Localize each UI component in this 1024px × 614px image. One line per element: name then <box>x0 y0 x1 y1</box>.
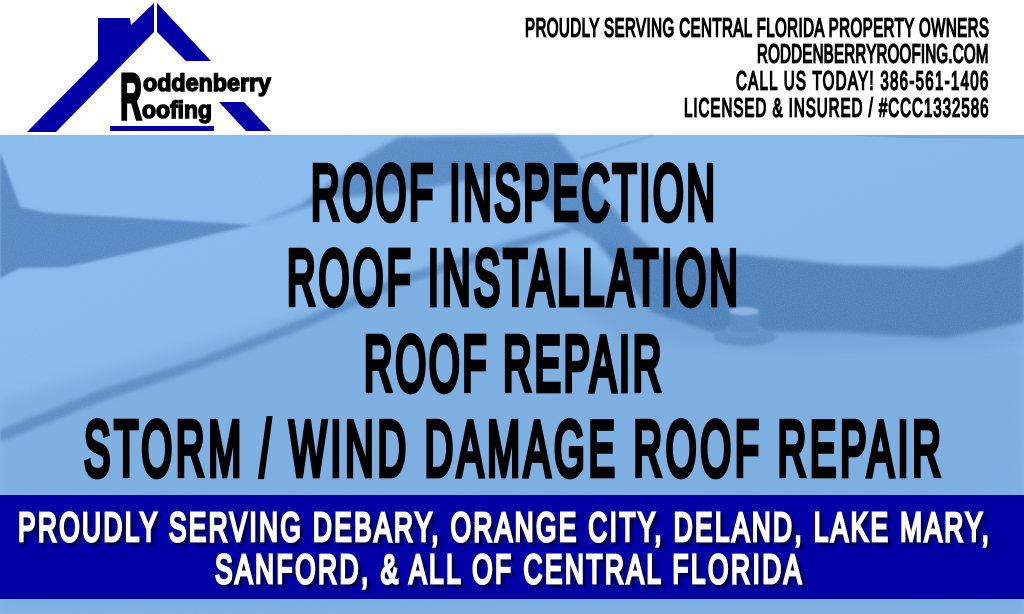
website: RODDENBERRYROOFING.COM <box>757 39 988 69</box>
service: roof repair: ROOF REPAIR <box>364 321 661 408</box>
icon: lower right roof slope <box>219 102 271 131</box>
logo: Roddenberry Roofing: R <box>120 59 142 133</box>
icon: right roof slope <box>157 3 211 61</box>
icon: left roof slope with chimney <box>27 3 154 132</box>
banner text: PROUDLY SERVING DEBARY, ORANGE CITY, DELAND, LAKE MARY, <box>18 505 989 551</box>
contact information <box>525 13 989 123</box>
logo: Roddenberry Roofing <box>27 3 272 133</box>
service: roof inspection: ROOF INSPECTION <box>311 150 715 237</box>
license: LICENSED & INSURED / #CCC1332586 <box>684 93 988 123</box>
phone: CALL US TODAY! 386-561-1406 <box>736 66 988 96</box>
icon: roof bolt <box>714 307 776 346</box>
service: roof installation: ROOF INSTALLATION <box>287 235 738 322</box>
service area banner <box>0 495 1024 599</box>
banner text: SANFORD, & ALL OF CENTRAL FLORIDA <box>215 547 801 593</box>
banner text <box>18 505 989 593</box>
service: storm and wind damage repair: STORM / WIND DAMAGE ROOF REPAIR <box>84 406 941 493</box>
tagline: PROUDLY SERVING CENTRAL FLORIDA PROPERTY OWNERS <box>525 13 989 43</box>
panel: roof photo background <box>0 135 1024 614</box>
logo underline <box>110 126 214 131</box>
logo text: oofing: oofing <box>142 97 212 124</box>
services list <box>84 150 941 493</box>
header background <box>0 0 1024 136</box>
logo text: oddenberry: oddenberry <box>143 70 272 97</box>
